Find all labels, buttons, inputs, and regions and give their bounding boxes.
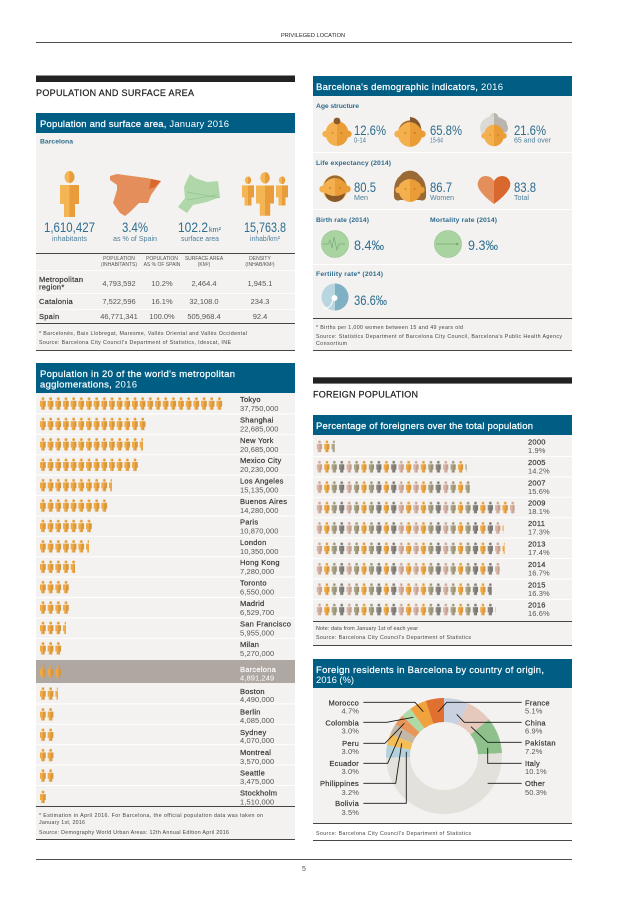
- row: 2015: 16.3%: [528, 589, 550, 598]
- row: New York: 20,685,000: [240, 445, 279, 454]
- stat: density: [242, 172, 288, 243]
- row: 2009: 2009: [528, 499, 546, 508]
- labels: right side: 7.2%: [525, 747, 543, 756]
- labels: left side: 3.0%: [342, 767, 359, 776]
- table: 16.1%: [151, 297, 173, 306]
- panel header: Percentage of foreigners over the total population: [316, 421, 533, 432]
- row: Seattle: [40, 769, 274, 786]
- panel header: [313, 76, 572, 96]
- row: 2009: 18.1%: [528, 507, 550, 516]
- labels: right side: China: [525, 718, 546, 728]
- row: London: 10,350,000: [240, 547, 279, 556]
- row: Tokyo: 37,750,000: [240, 404, 279, 413]
- table: 7,522,596: [102, 297, 136, 306]
- labels: left side: Ecuador: [329, 759, 359, 768]
- stat: share of Spain with map: [110, 174, 161, 243]
- table: Metropolitan: [39, 275, 83, 284]
- panel header: agglomerations, 2016: [40, 380, 137, 390]
- stat: age 15-64: 15-64: [430, 136, 443, 144]
- stat: surface area with map: 102.2: [178, 219, 208, 235]
- table: POPULATION: [103, 256, 135, 262]
- row: Los Angeles: Los Angeles: [240, 477, 284, 486]
- row: Hong Kong: 7,280,000: [240, 567, 274, 576]
- row: Barcelona: [40, 665, 277, 682]
- row: Los Angeles: 15,135,000: [240, 486, 279, 495]
- row: Stockholm: Stockholm: [240, 788, 277, 798]
- labels: left side: 3.0%: [342, 726, 359, 736]
- row: Barcelona: Barcelona: [240, 665, 277, 674]
- row: New York: [40, 436, 279, 454]
- row: 2011: 17.3%: [528, 528, 550, 537]
- stat: women: [394, 171, 454, 202]
- row: 2013: 2013: [528, 540, 546, 548]
- table: 32,108.0: [189, 297, 219, 306]
- panel: percentage of foreigners: [313, 415, 572, 646]
- row: 2011: 2011: [528, 519, 545, 528]
- stat: men: [319, 175, 376, 202]
- row: Shanghai: Shanghai: [240, 415, 274, 424]
- stat: density: 15,763.8: [244, 219, 286, 235]
- stat: mortality rate: [434, 230, 498, 258]
- row: Toronto: Toronto: [240, 579, 267, 588]
- stat: total with heart: 83.8: [514, 179, 536, 195]
- row: Boston: Boston: [240, 687, 265, 696]
- row: San Francisco: [40, 619, 291, 637]
- row: Buenos Aires: [40, 497, 287, 515]
- stat: surface area with map: km²: [209, 227, 222, 234]
- stat: birth rate: 8.4‰: [354, 237, 384, 253]
- stat: inhabitants: 1,610,427: [44, 219, 95, 235]
- footnote and source: Source: Demography World Urban Areas: 12th Annual Edition April 2016: [39, 830, 229, 836]
- row: Madrid: 6,529,700: [240, 608, 274, 617]
- labels: right side: 5.1%: [525, 706, 543, 716]
- row: 2011: [317, 519, 550, 537]
- table: SURFACE AREA: [185, 256, 224, 262]
- note and source: Source: Barcelona City Council's Department of Statistics: [316, 635, 471, 641]
- labels: right side: 50.3%: [525, 788, 547, 797]
- panel header: [313, 659, 572, 688]
- stat: women: Women: [430, 193, 454, 202]
- row: Paris: Paris: [240, 517, 258, 526]
- footnote and source: * Births per 1,000 women between 15 and 49 years old: [316, 325, 463, 331]
- label: birth rate: Birth rate (2014): [316, 217, 369, 224]
- table: Catalonia: [39, 297, 74, 306]
- row: San Francisco: San Francisco: [240, 619, 291, 628]
- labels: left side: Colombia: [325, 718, 360, 728]
- row: Seattle: Seattle: [240, 769, 265, 778]
- row: Toronto: 6,550,000: [240, 588, 274, 597]
- labels: left side: Philippines: [320, 779, 359, 788]
- row: Toronto: [40, 579, 274, 597]
- footnote and source: [36, 806, 295, 840]
- row: Stockholm: 1,510,000: [240, 798, 274, 806]
- panel header: Population and surface area, January 2016: [40, 119, 229, 130]
- table: Spain: [39, 312, 59, 321]
- table: (INHABITANTS): [101, 262, 137, 268]
- stat: age 15-64: [394, 117, 462, 147]
- table: 46,771,341: [100, 312, 138, 321]
- panel header: [36, 113, 295, 133]
- row: Milan: 5,270,000: [240, 649, 274, 658]
- row: 2014: 2014: [528, 560, 546, 569]
- row: 2005: [317, 458, 550, 475]
- table: 1,945.1: [247, 279, 273, 288]
- stat: age 0-14: 0-14: [354, 136, 366, 144]
- labels: left side: 3.2%: [342, 788, 359, 797]
- labels: right side: Italy: [525, 759, 540, 768]
- stat: birth rate: [322, 230, 384, 258]
- row: Montreal: Montreal: [240, 748, 271, 757]
- stat: fertility rate: [322, 284, 387, 310]
- table: (KM²): [198, 262, 211, 268]
- stat: mortality rate: 9.3‰: [468, 237, 498, 253]
- row: Los Angeles: [40, 477, 284, 495]
- row: Berlin: [40, 707, 274, 725]
- stat: density: inhab/km²: [250, 234, 280, 243]
- table: [36, 253, 295, 324]
- row: New York: New York: [240, 436, 274, 445]
- panel header: Population in 20 of the world's metropolitan: [40, 369, 235, 380]
- labels: left side: 4.7%: [342, 706, 359, 716]
- row: Stockholm: [40, 788, 277, 806]
- labels: left side: [320, 698, 360, 817]
- row: Mexico City: [40, 456, 282, 474]
- row: Hong Kong: Hong Kong: [240, 558, 280, 567]
- row: London: [40, 538, 279, 556]
- stat: age 0-14: [322, 118, 386, 146]
- table: POPULATION: [146, 256, 178, 262]
- stat: surface area with map: [178, 174, 222, 243]
- table: 4,793,592: [102, 279, 136, 288]
- label: life expectancy: Life expectancy (2014): [316, 160, 391, 167]
- section heading: population and surface area: [36, 76, 295, 98]
- panel header: [36, 363, 295, 393]
- Barcelona highlight band: [36, 660, 295, 683]
- table: 10.2%: [151, 279, 173, 288]
- leader lines: [363, 702, 522, 803]
- row: Montreal: [40, 748, 274, 766]
- donut chart: [398, 710, 490, 802]
- table: 505,968.4: [187, 312, 221, 321]
- panel: foreign residents by origin: [313, 659, 572, 841]
- labels: left side: 3.0%: [342, 747, 359, 756]
- row: 2015: [317, 580, 550, 598]
- labels: right side: Other: [525, 779, 545, 788]
- table: AS % OF SPAIN: [144, 262, 181, 268]
- panel header: 2016 (%): [316, 675, 354, 686]
- row: Boston: [40, 687, 274, 704]
- table: region*: [39, 282, 65, 292]
- row: Berlin: Berlin: [240, 707, 261, 716]
- stat: age 65 and over: [480, 113, 551, 146]
- page header: PRIVILEGED LOCATION: [281, 33, 345, 39]
- stat: age 15-64: 65.8%: [430, 122, 462, 138]
- row: Sydney: 4,070,000: [240, 736, 274, 745]
- section heading: foreign population: [313, 377, 572, 400]
- stat: inhabitants: inhabitants: [52, 234, 87, 243]
- stat: women: 86.7: [430, 179, 452, 195]
- panel: demographic indicators: [313, 76, 572, 351]
- row: Hong Kong: [40, 558, 280, 576]
- row: Berlin: 4,085,000: [240, 716, 274, 725]
- row: 2007: 2007: [528, 478, 546, 487]
- stat: inhabitants: [44, 171, 95, 243]
- row: Milan: Milan: [240, 640, 259, 649]
- row: Mexico City: 20,230,000: [240, 465, 279, 474]
- table: 92.4: [253, 312, 267, 321]
- section heading: population and surface area: POPULATION AND SURFACE AREA: [36, 88, 194, 98]
- panel header: Foreign residents in Barcelona by country of origin,: [316, 665, 544, 676]
- footnote and source: * Estimation in April 2016. For Barcelona, the official population data was taken on: [39, 813, 263, 819]
- row: Shanghai: [40, 415, 279, 433]
- stat: men: Men: [354, 193, 368, 202]
- labels: right side: 10.1%: [525, 767, 547, 776]
- row: 2016: 16.6%: [528, 609, 550, 618]
- note and source: [313, 621, 572, 646]
- row: 2000: 2000: [528, 438, 546, 446]
- row: Sydney: [40, 728, 274, 745]
- row: Buenos Aires: 14,280,000: [240, 506, 279, 515]
- row: 2015: 2015: [528, 580, 546, 589]
- stat: share of Spain with map: 3.4%: [122, 219, 148, 235]
- note and source: Note: data from January 1st of each year: [316, 626, 418, 632]
- stat: total with heart: [478, 176, 536, 204]
- labels: right side: France: [525, 698, 550, 708]
- labels: right side: 6.9%: [525, 726, 543, 736]
- row: 2005: 2005: [528, 458, 546, 467]
- row: Shanghai: 22,685,000: [240, 424, 279, 433]
- row: 2014: 16.7%: [528, 568, 550, 577]
- table: 234.3: [251, 297, 269, 306]
- footnote and source: [36, 331, 295, 351]
- footnote and source: [313, 318, 572, 351]
- row: 2007: [317, 478, 550, 496]
- table: DENSITY: [249, 256, 271, 262]
- label: fertility rate: Fertility rate* (2014): [316, 271, 383, 278]
- stat: fertility rate: 36.6‰: [354, 292, 387, 308]
- labels: left side: Bolivia: [335, 799, 360, 808]
- row: Paris: [40, 517, 279, 535]
- table: (INHAB/KM²): [245, 262, 275, 268]
- stat: men: 80.5: [354, 179, 376, 195]
- row: 2013: 17.4%: [528, 548, 550, 557]
- row: Boston: 4,490,000: [240, 695, 274, 704]
- labels: right side: [525, 698, 556, 797]
- row: 2013: [317, 540, 550, 557]
- row: Paris: 10,870,000: [240, 526, 279, 535]
- labels: left side: Peru: [342, 739, 359, 748]
- row: Buenos Aires: Buenos Aires: [240, 497, 287, 506]
- labels: left side: 3.5%: [342, 808, 359, 817]
- panel: world metropolitan agglomerations: [36, 363, 295, 840]
- table: 100.0%: [149, 312, 175, 321]
- row: 2000: 1.9%: [528, 446, 546, 455]
- row: Barcelona: 4,891,249: [240, 674, 274, 682]
- footnote and source: January 1st, 2016: [39, 820, 85, 826]
- panel header: [313, 415, 572, 435]
- row: 2000: [317, 438, 546, 455]
- stat: surface area with map: surface area: [181, 234, 220, 243]
- label: Barcelona: Barcelona: [40, 138, 73, 146]
- row: Mexico City: Mexico City: [240, 456, 282, 465]
- row: 2016: 2016: [528, 601, 546, 610]
- row: 2009: [317, 499, 550, 516]
- row: 2007: 15.6%: [528, 487, 550, 496]
- panel header: Barcelona's demographic indicators, 2016: [316, 82, 503, 93]
- row: Tokyo: Tokyo: [240, 395, 261, 404]
- row: Tokyo: [40, 395, 279, 413]
- panel: population and surface area: [36, 113, 295, 351]
- labels: right side: Pakistan: [525, 738, 556, 748]
- footnote and source: Consortium: [316, 341, 348, 347]
- source: Source: Barcelona City Council's Department of Statistics: [316, 831, 471, 837]
- stat: age 65 and over: 65 and over: [514, 136, 551, 144]
- page footer: 5: [302, 866, 306, 873]
- row: Milan: [40, 640, 274, 658]
- label: age structure: Age structure: [316, 103, 359, 110]
- footnote and source: * Barcelonès, Baix Llobregat, Maresme, Vallès Oriental and Vallès Occidental: [39, 331, 247, 337]
- row: Madrid: Madrid: [240, 599, 264, 608]
- row: London: London: [240, 538, 267, 547]
- stat: share of Spain with map: as % of Spain: [113, 234, 157, 243]
- labels: left side: Morocco: [328, 698, 359, 708]
- footnote and source: Source: Barcelona City Council's Department of Statistics, Idescat, INE: [39, 340, 231, 346]
- stat: age 0-14: 12.6%: [354, 122, 386, 138]
- stat: age 65 and over: 21.6%: [514, 122, 546, 138]
- row: 2016: [317, 601, 550, 618]
- row: Madrid: [40, 599, 274, 617]
- footnote and source: Source: Statistics Department of Barcelona City Council, Barcelona's Public Health Agency: [316, 334, 562, 340]
- row: Montreal: 3,570,000: [240, 757, 274, 766]
- table: 2,464.4: [191, 279, 217, 288]
- label: mortality rate: Mortality rate (2014): [430, 217, 497, 224]
- stat: total with heart: Total: [514, 193, 529, 202]
- row: San Francisco: 5,955,000: [240, 628, 274, 637]
- row: 2014: [317, 560, 550, 577]
- row: Sydney: Sydney: [240, 728, 267, 737]
- row: Seattle: 3,475,000: [240, 777, 274, 786]
- row: 2005: 14.2%: [528, 466, 550, 475]
- section heading: foreign population: FOREIGN POPULATION: [313, 390, 418, 400]
